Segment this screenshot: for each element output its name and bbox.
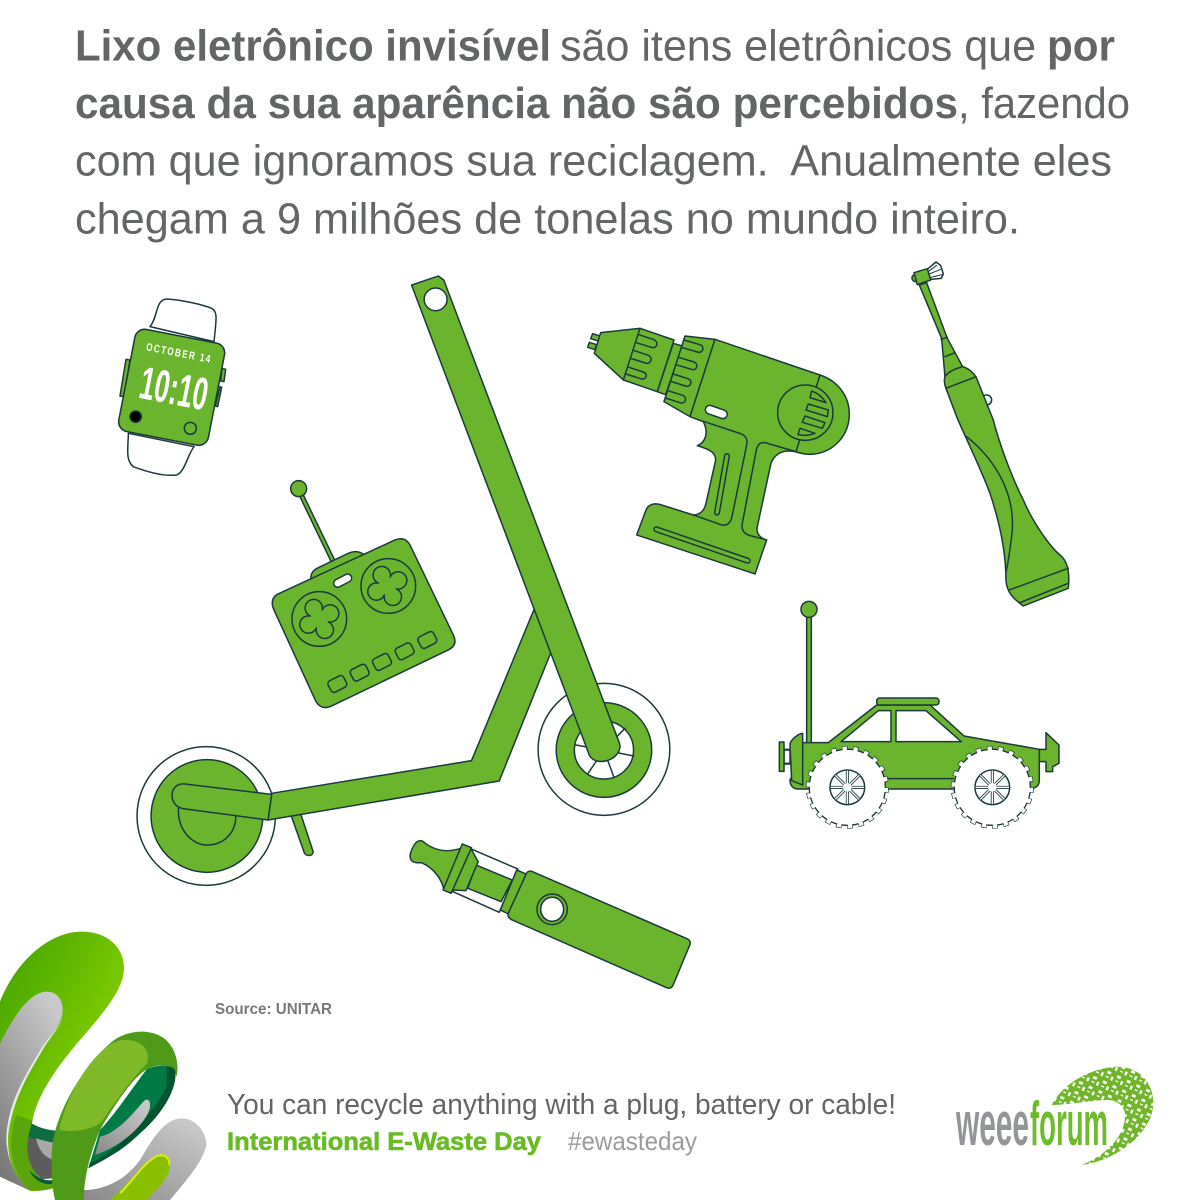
title: , fazendo xyxy=(958,79,1130,128)
watch ring xyxy=(184,422,196,434)
watch dot xyxy=(130,411,141,422)
deck xyxy=(268,605,556,820)
icon: cordless drill xyxy=(588,328,849,574)
title: com que ignoramos sua reciclagem. Anualmente eles xyxy=(75,136,1112,186)
title: por xyxy=(1047,22,1115,70)
icon: toy buggy xyxy=(779,601,1059,827)
icon: remote control xyxy=(272,481,455,708)
rear wheel xyxy=(953,748,1032,827)
campaign name: International E-Waste Day xyxy=(227,1128,541,1156)
icon: weeeforum logo: weee xyxy=(956,1090,1029,1159)
title: causa da sua aparência não são percebidos xyxy=(75,79,958,128)
kickstand xyxy=(291,813,313,856)
icon: electric scooter xyxy=(137,276,670,885)
watch date: OCTOBER 14 xyxy=(145,341,213,366)
icon: international e-waste day swirl logo xyxy=(0,932,206,1200)
title xyxy=(75,22,1130,244)
stem xyxy=(412,276,620,761)
hashtag: #ewasteday xyxy=(568,1126,697,1156)
rear wheel xyxy=(137,747,275,885)
front wheel xyxy=(808,748,887,827)
front wheel xyxy=(538,683,670,815)
icon: electric toothbrush xyxy=(912,262,1069,606)
source note: Source: UNITAR xyxy=(215,1001,332,1018)
icon: vape pen xyxy=(410,841,690,988)
tagline: You can recycle anything with a plug, battery or cable! xyxy=(227,1089,896,1121)
icon: smartwatch xyxy=(117,299,226,475)
rear arm xyxy=(172,784,272,820)
logo crescent xyxy=(1052,1067,1153,1165)
title: Lixo eletrônico invisível xyxy=(75,22,551,70)
stem hole xyxy=(424,288,447,311)
watch time: 10:10 xyxy=(136,356,213,420)
title: são itens eletrônicos que xyxy=(560,22,1036,70)
title: chegam a 9 milhões de tonelas no mundo inteiro. xyxy=(75,194,1020,244)
icon: weeeforum logo xyxy=(956,1067,1153,1165)
